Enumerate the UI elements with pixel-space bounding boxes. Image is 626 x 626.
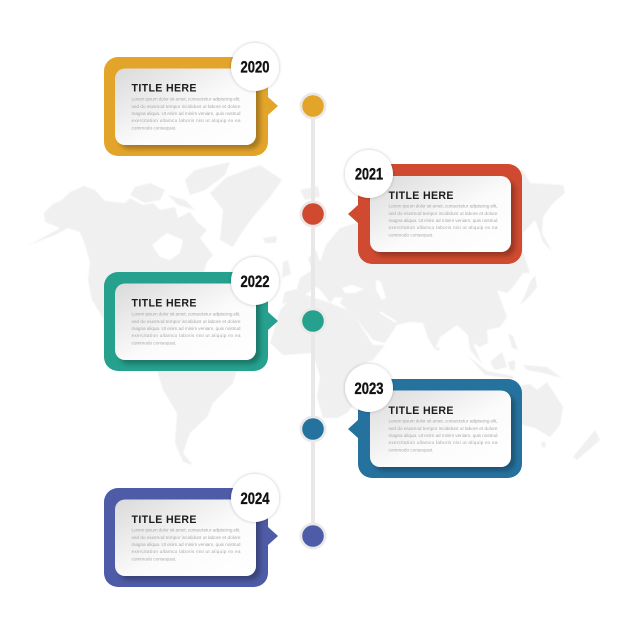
New Zealand: [573, 430, 600, 460]
title: TITLE HERE: [132, 82, 196, 94]
Persian Gulf: [380, 312, 396, 322]
card frame with pointer: [104, 488, 278, 587]
body text: magna aliqua. Ut enim ad minim veniam, quis nostrud: [132, 111, 241, 116]
content panel: [115, 68, 256, 145]
timeline dot 2024: [300, 522, 326, 550]
New Guinea: [523, 365, 562, 378]
body text: sed do eiusmod tempor incididunt ut labore et dolore: [132, 319, 241, 324]
year badge: [345, 150, 393, 198]
year badge: 2021: [355, 164, 383, 184]
body text: sed do eiusmod tempor incididunt ut labore et dolore: [388, 426, 498, 431]
card frame with pointer: [104, 272, 278, 371]
card 2020: [104, 43, 279, 156]
Borneo: [490, 352, 507, 370]
body text: [132, 312, 241, 346]
body text: exercitation ullamco laboris nisi ut aliquip ex ea: [388, 225, 498, 230]
year badge: [231, 474, 279, 522]
body text: magna aliqua. Ut enim ad minim veniam, quis nostrud: [388, 433, 498, 438]
body text: [388, 204, 498, 238]
body text: Lorem ipsum dolor sit amet, consectetur adipiscing elit,: [132, 528, 240, 532]
year badge: 2023: [354, 379, 384, 398]
Philippines: [508, 333, 518, 350]
body text: Lorem ipsum dolor sit amet, consectetur adipiscing elit,: [388, 204, 498, 208]
year badge: 2020: [240, 58, 270, 76]
Eurasia: [282, 170, 565, 364]
year badge: [231, 43, 279, 91]
body text: commodo consequat.: [132, 340, 176, 346]
body text: exercitation ullamco laboris nisi ut aliquip ex ea: [388, 440, 498, 445]
title: TITLE HERE: [132, 514, 196, 526]
Iceland: [263, 236, 277, 243]
Sulawesi: [508, 360, 515, 371]
timeline dot 2022: [300, 308, 326, 334]
timeline dot 2021: [300, 200, 326, 228]
world map background: [27, 162, 600, 465]
content panel: [370, 176, 511, 252]
body text: [132, 528, 241, 562]
body text: commodo consequat.: [132, 556, 176, 562]
UK: [282, 260, 291, 278]
Sumatra and Java: [467, 355, 513, 379]
card frame with pointer: [348, 164, 522, 264]
card 2023: [345, 364, 522, 478]
body text: exercitation ullamco laboris nisi ut aliquip ex ea: [132, 118, 241, 123]
body text: magna aliqua. Ut enim ad minim veniam, quis nostrud: [388, 218, 498, 223]
year badge: 2022: [240, 272, 270, 291]
title: TITLE HERE: [388, 405, 454, 417]
Japan: [520, 275, 537, 305]
body text: commodo consequat.: [388, 448, 433, 452]
body text: [132, 96, 241, 130]
Australia: [518, 382, 563, 437]
body text: Lorem ipsum dolor sit amet, consectetur adipiscing elit,: [388, 418, 498, 424]
South America: [157, 370, 237, 465]
content panel: [370, 390, 511, 467]
card 2022: [104, 257, 279, 371]
Sri Lanka: [436, 347, 440, 351]
body text: sed do eiusmod tempor incididunt ut labore et dolore: [132, 535, 241, 540]
card frame with pointer: [348, 379, 522, 478]
body text: exercitation ullamco laboris nisi ut aliquip ex ea: [132, 333, 241, 338]
title: TITLE HERE: [388, 190, 454, 202]
year badge: [345, 364, 393, 412]
Tasmania: [541, 442, 546, 448]
Arctic islands: [130, 162, 230, 210]
card frame with pointer: [104, 57, 278, 156]
body text: sed do eiusmod tempor incididunt ut labore et dolore: [388, 211, 498, 216]
title: TITLE HERE: [132, 298, 196, 310]
Greenland: [210, 165, 282, 247]
timeline vertical line: [311, 106, 315, 536]
Svalbard and northern islands: [300, 186, 320, 200]
timeline dot 2023: [300, 416, 326, 442]
timeline dot 2020: [300, 92, 326, 120]
body text: commodo consequat.: [388, 232, 433, 238]
body text: commodo consequat.: [132, 126, 176, 130]
body text: Lorem ipsum dolor sit amet, consectetur adipiscing elit,: [132, 312, 240, 316]
body text: Lorem ipsum dolor sit amet, consectetur adipiscing elit,: [132, 96, 240, 102]
card 2024: [104, 474, 279, 587]
content panel: [115, 284, 256, 360]
body text: magna aliqua. Ut enim ad minim veniam, quis nostrud: [132, 326, 241, 331]
content panel: [115, 500, 256, 576]
North America: [27, 186, 213, 322]
inland seas: [342, 280, 386, 300]
card 2021: [345, 150, 522, 264]
year badge: 2024: [240, 489, 270, 508]
body text: sed do eiusmod tempor incididunt ut labore et dolore: [132, 104, 241, 109]
Hudson Bay: [152, 233, 183, 260]
body text: exercitation ullamco laboris nisi ut aliquip ex ea: [132, 549, 241, 554]
body text: magna aliqua. Ut enim ad minim veniam, quis nostrud: [132, 542, 241, 547]
year badge: [231, 257, 279, 305]
body text: [388, 418, 498, 452]
Africa: [270, 292, 385, 418]
